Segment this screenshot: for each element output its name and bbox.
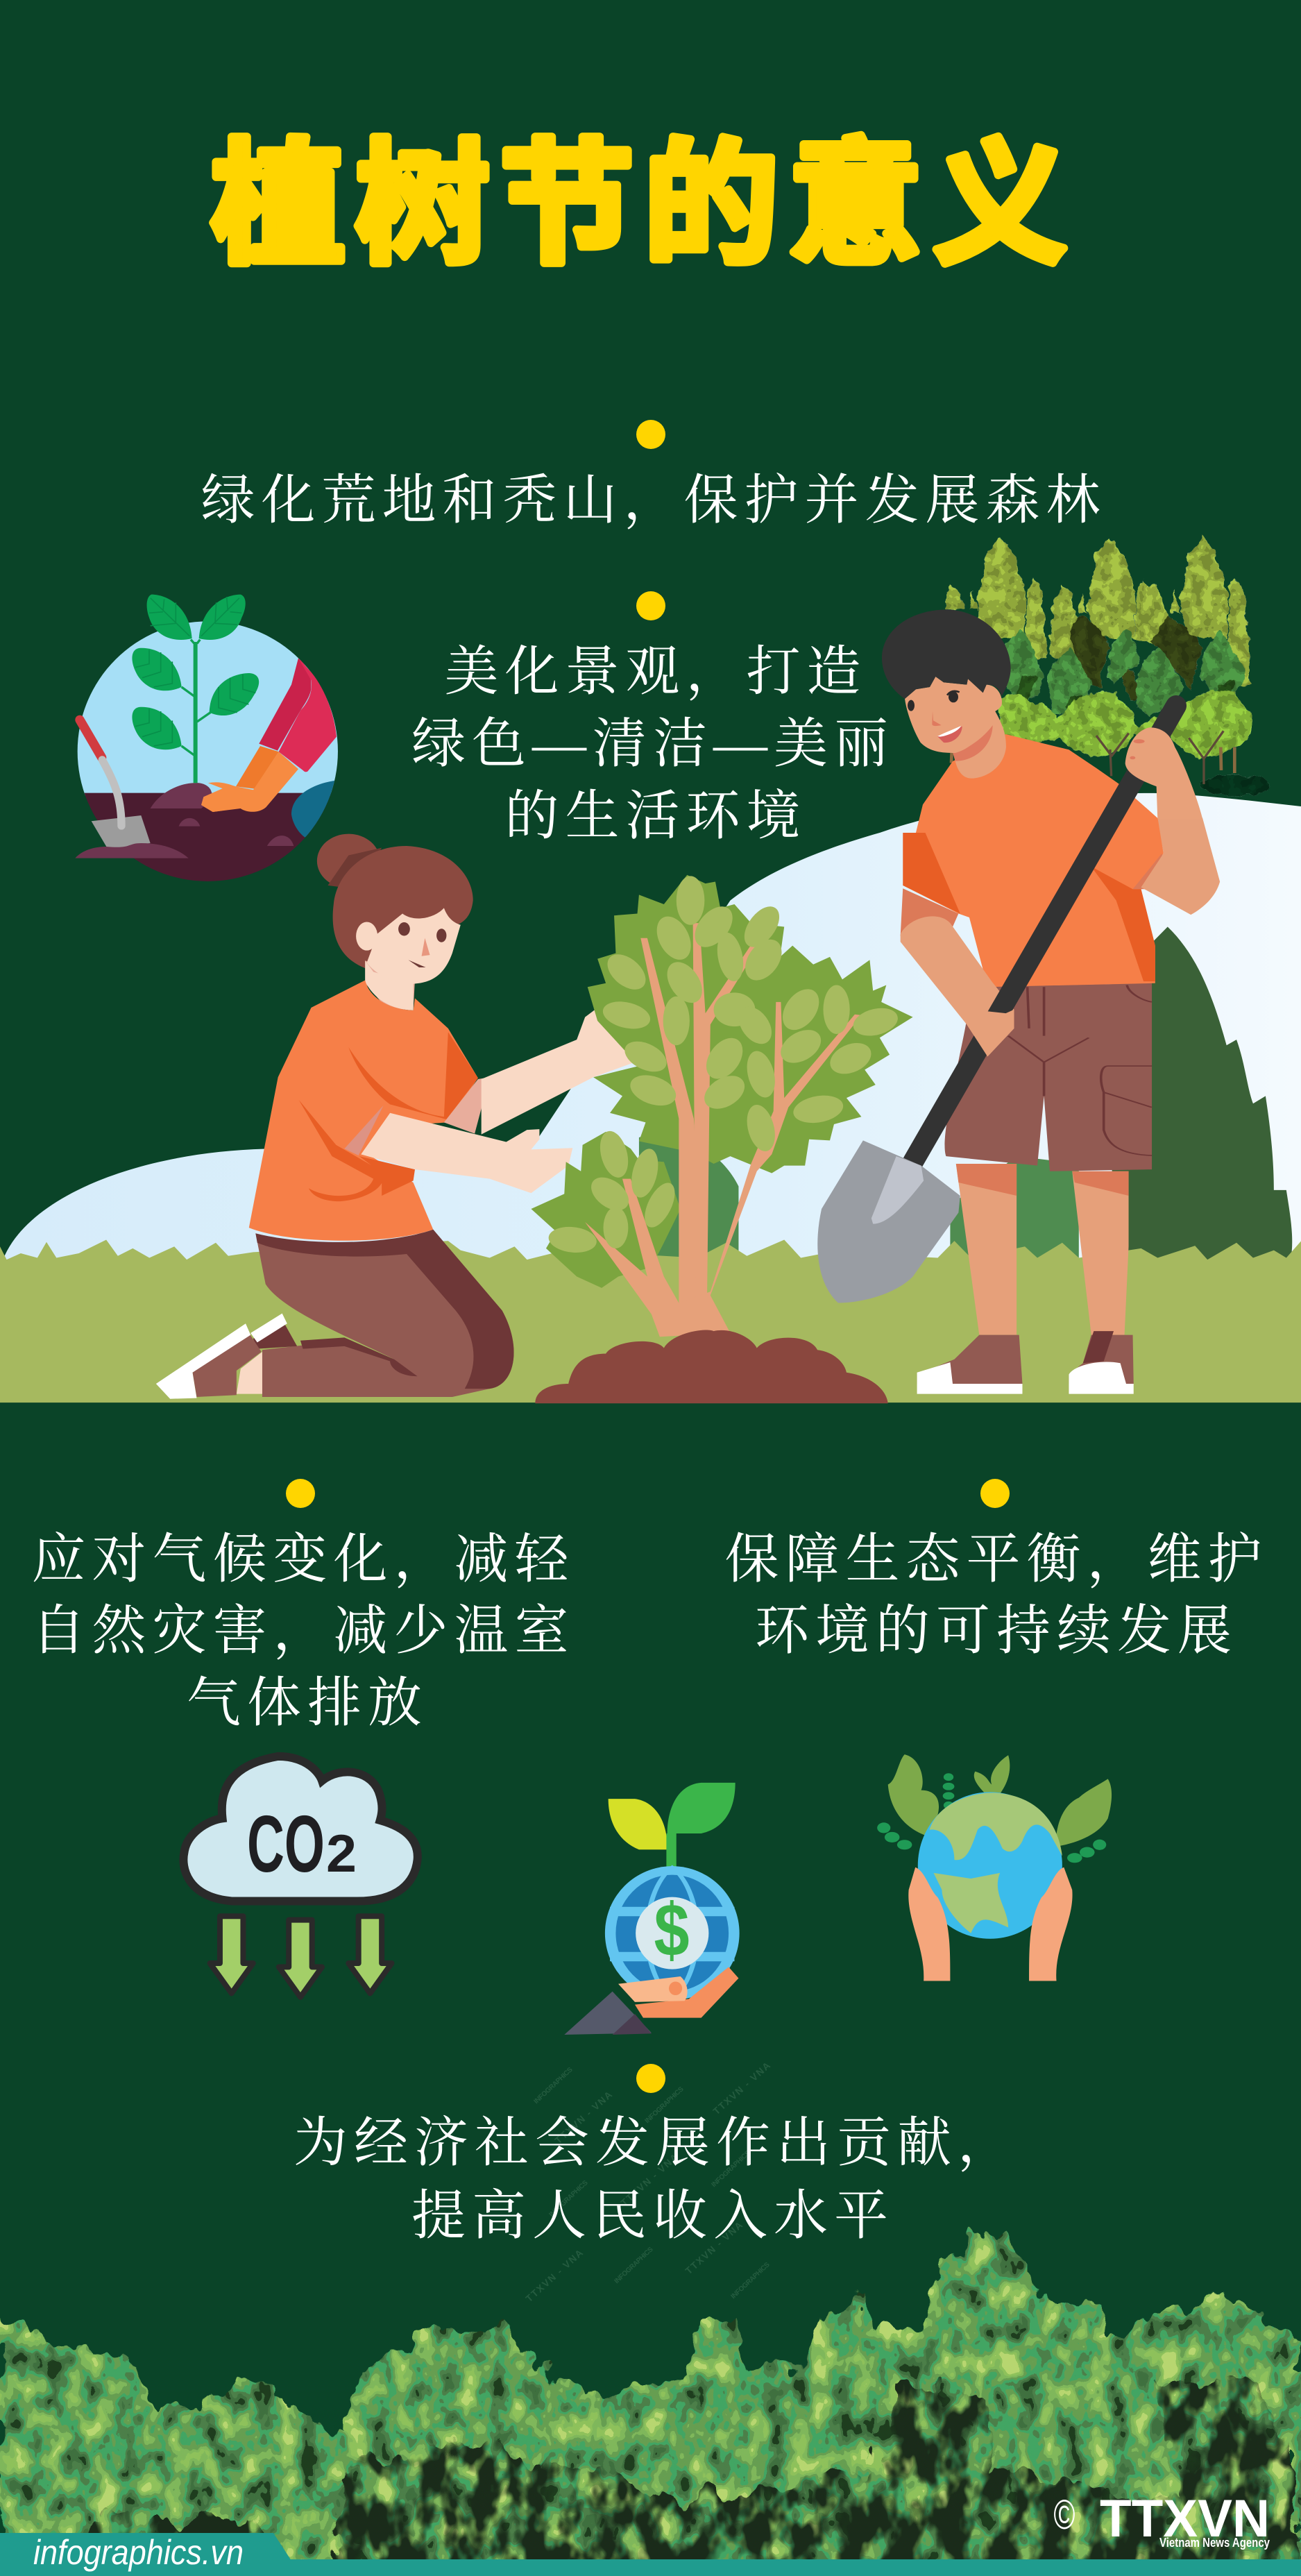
text: greening: 绿化荒地和秃山，保护并发展森林 [201,470,1107,530]
sky hills [0,793,1301,1269]
logo: TTXVN: TTXVN [1100,2489,1270,2548]
icon: CO2 cloud with arrows: 2 [326,1824,357,1883]
watermarks [523,2060,772,2304]
logo: TTXVN: Vietnam News Agency [1159,2536,1270,2550]
background trees [639,927,1292,1262]
watermarks: INFOGRAPHICS [548,2179,590,2219]
man with shovel [817,609,1220,1394]
man head and right hand [882,609,1202,820]
text: ecological balance: 保障生态平衡，维护 [724,1529,1268,1589]
text: climate change: 气体排放 [187,1672,428,1733]
watermarks: TTXVN - VNA [552,2089,614,2146]
text: climate change: 自然灾害，减少温室 [31,1600,575,1661]
text: landscape: 的生活环境 [504,786,807,846]
watermarks: INFOGRAPHICS [533,2066,575,2105]
watermarks: INFOGRAPHICS [644,2085,686,2125]
forest trunks [951,731,1234,784]
text: economic development: 提高人民收入水平 [411,2185,894,2246]
watermarks: INFOGRAPHICS [613,2246,655,2285]
watermarks: TTXVN - VNA [523,2247,585,2304]
scene: planting a tree [0,609,1301,1403]
text: climate change: 应对气候变化，减轻 [31,1529,575,1589]
bullet 3 [286,1479,315,1508]
forest illustration [944,536,1270,796]
text: economic development: 为经济社会发展作出贡献， [294,2112,1018,2173]
woman [156,834,643,1399]
bullet 5 [636,2064,665,2093]
young tree [531,875,913,1337]
logo: TTXVN: © [1054,2491,1075,2538]
bullet 4 [980,1479,1010,1508]
text: landscape: 绿色—清洁—美丽 [411,713,894,774]
icon: money globe sprout [564,1783,740,2035]
soil mound [535,1330,888,1403]
icon: hand planting seedling [75,595,340,883]
icon: money globe sprout: $ [654,1888,690,1972]
ground [0,1239,1301,1403]
watermarks: INFOGRAPHICS [730,2261,772,2300]
text: ecological balance: 环境的可持续发展 [755,1600,1238,1661]
watermarks: INFOGRAPHICS [711,2149,752,2189]
watermarks: TTXVN - VNA [618,2151,680,2208]
footer site name: infographics.vn [33,2533,244,2572]
icon: hands holding earth [877,1754,1112,1981]
watermarks: TTXVN - VNA [683,2219,745,2276]
icon: CO2 cloud with arrows: CO [247,1799,325,1889]
bullet 1 [636,420,665,449]
text: climate change [31,1529,575,1733]
title: 植树节的意义 [211,130,1077,280]
footer tab [0,2533,291,2576]
text: economic development [294,2112,1018,2246]
text: ecological balance [724,1529,1268,1661]
text: landscape: 美化景观，打造 [444,641,867,702]
icon: CO2 cloud with arrows [183,1756,418,1997]
tree line [0,2236,1301,2576]
bottom bar [0,2559,1301,2576]
bullet 2 [636,591,665,620]
text: landscape [411,641,894,846]
watermarks: TTXVN - VNA [711,2060,772,2117]
